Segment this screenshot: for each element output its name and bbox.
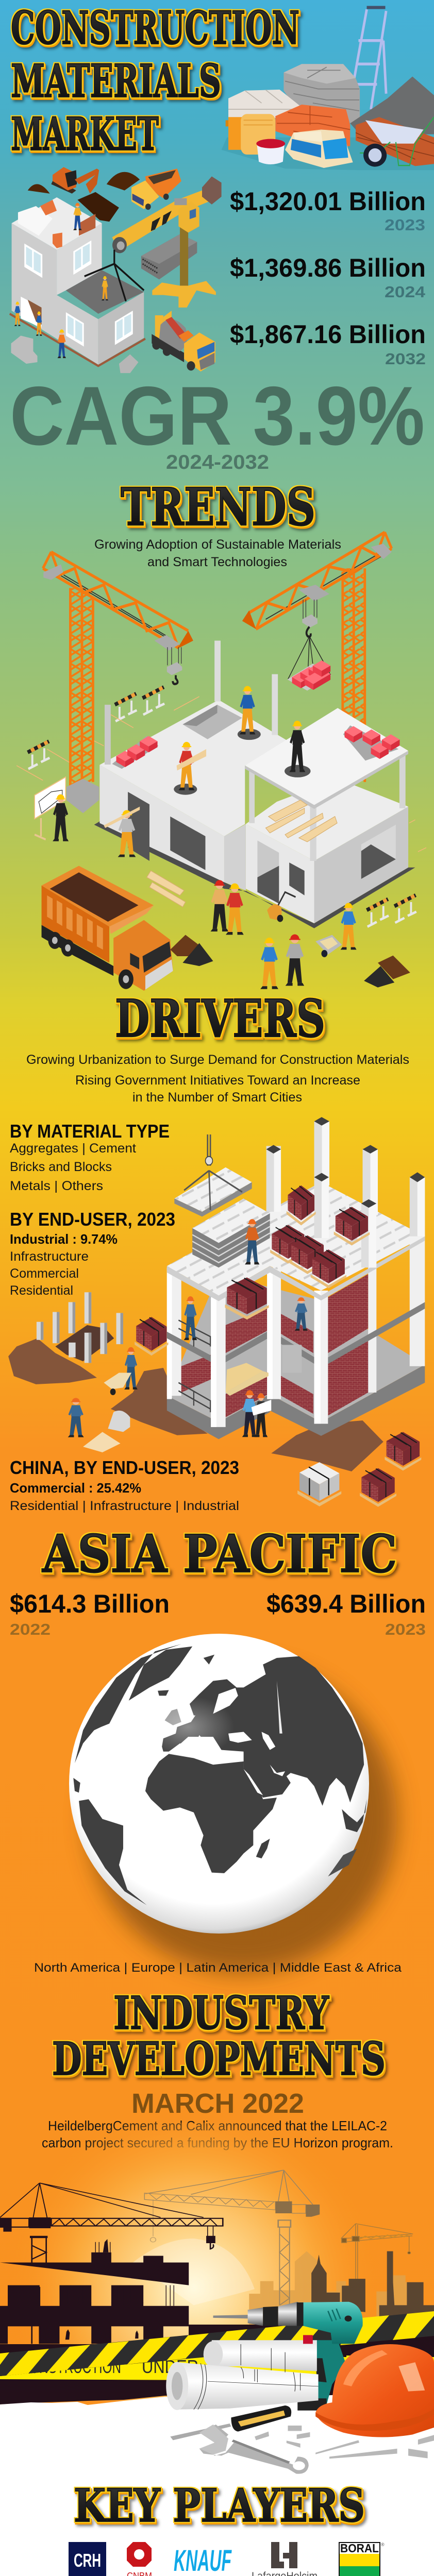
map: North America bbox=[75, 1644, 181, 1763]
logo: CRH bbox=[69, 2542, 106, 2576]
segment: by end-user: Commercial bbox=[10, 1266, 79, 1281]
icon: screwdriver bbox=[170, 2405, 291, 2440]
market value 2023: 2023 bbox=[385, 216, 425, 234]
title bbox=[11, 1, 299, 161]
icon: right tower crane bbox=[242, 532, 392, 782]
icon: left tower crane bbox=[43, 552, 193, 813]
logo: Boral bbox=[339, 2541, 385, 2576]
drivers text: Growing Urbanization to Surge Demand for Construction Materials bbox=[26, 1053, 409, 1067]
asia pacific value 2023: $639.4 Billion bbox=[266, 1589, 426, 1618]
map: Madagascar bbox=[256, 1839, 270, 1858]
segment: by material type: Bricks and Blocks bbox=[10, 1160, 112, 1174]
icon: cement bags bbox=[285, 129, 353, 168]
logos row 1 bbox=[69, 2541, 385, 2576]
caution tape: text tape: UNDER bbox=[142, 2356, 198, 2377]
segment: china by end-user: Commercial : 25.42% bbox=[10, 1480, 141, 1496]
icon: concrete panels bbox=[141, 234, 197, 279]
market value 2024 bbox=[230, 253, 426, 301]
segment: by end-user: BY END-USER, 2023 bbox=[10, 1209, 175, 1230]
map: Australia bbox=[328, 1849, 357, 1876]
icon: cement mixer truck bbox=[152, 311, 215, 371]
logo: CRH: CRH bbox=[74, 2550, 101, 2571]
icon: timber planks bbox=[356, 117, 434, 166]
icon: dump truck bbox=[131, 168, 181, 210]
icon: suspended bricks bbox=[287, 660, 331, 690]
segment: china by end-user: Residential | Infrastructure | Industrial bbox=[10, 1499, 239, 1513]
map: Scandinavia bbox=[190, 1679, 237, 1716]
segment: by end-user: Industrial : 9.74% bbox=[10, 1231, 118, 1247]
market value 2023 bbox=[230, 187, 426, 234]
icon: concrete building bbox=[94, 640, 415, 928]
workers bbox=[53, 686, 357, 989]
workers bbox=[14, 203, 108, 358]
icon: foundation pit and piles bbox=[37, 1292, 123, 1363]
asia pacific value 2023 bbox=[266, 1589, 426, 1638]
icon: dark building bbox=[0, 2252, 189, 2344]
asia pacific value 2022 bbox=[10, 1589, 170, 1638]
caution tape: text tape: CONSTRUCTION bbox=[21, 2356, 121, 2377]
market value 2032: 2032 bbox=[385, 350, 426, 368]
market value 2023: $1,320.01 Billion bbox=[230, 187, 426, 216]
icon: dark skyline bbox=[311, 2251, 434, 2317]
heading: industry developments: INDUSTRY bbox=[113, 1986, 329, 2040]
heading: asia pacific: ASIA PACIFIC bbox=[42, 1523, 397, 1584]
icon: brick pallets bbox=[135, 1185, 421, 1507]
map: Africa bbox=[145, 1754, 277, 1873]
title: CONSTRUCTION bbox=[11, 1, 299, 55]
icon: second crane bbox=[144, 2170, 313, 2305]
icon: dark tower crane bbox=[0, 2183, 223, 2344]
sky glow bbox=[0, 2123, 434, 2401]
illustration: construction site bbox=[16, 532, 426, 991]
segment: china by end-user bbox=[10, 1457, 239, 1513]
icon: red bricks on roof bbox=[112, 725, 399, 769]
icon: sun disk bbox=[133, 2239, 255, 2305]
CAGR: 2024-2032 bbox=[166, 451, 269, 473]
icon: concrete stack and slab bbox=[174, 1134, 270, 1267]
icon: barriers bbox=[16, 687, 426, 927]
illustration: tools bbox=[166, 2340, 434, 2474]
drivers text bbox=[26, 1053, 409, 1105]
logo: CNBM bbox=[127, 2542, 152, 2576]
icon: white bricks bbox=[228, 90, 301, 118]
map: Greenland and Iceland bbox=[129, 1647, 214, 1701]
icon: globe bbox=[69, 1634, 369, 1934]
map: South America bbox=[79, 1799, 147, 1905]
segment: by end-user bbox=[10, 1209, 175, 1298]
illustration: skyline with cranes bbox=[0, 2170, 434, 2344]
icon: dirt piles bbox=[170, 935, 410, 988]
map: UK bbox=[165, 1709, 181, 1725]
segment: by end-user: Infrastructure bbox=[10, 1249, 89, 1264]
logo: Boral: BORAL bbox=[340, 2541, 379, 2555]
icon: blueprint board bbox=[35, 777, 65, 839]
drivers text: Rising Government Initiatives Toward an Increase bbox=[75, 1073, 360, 1088]
logo: LafargeHolcim bbox=[252, 2542, 318, 2576]
market value 2024: $1,369.86 Billion bbox=[230, 253, 426, 282]
development text: carbon project secured a funding by the EU Horizon program. bbox=[42, 2135, 393, 2150]
icon: yellow tower crane bbox=[85, 176, 222, 308]
globe shadow bbox=[88, 1664, 397, 1973]
icon: bolts and drill bits bbox=[255, 2426, 434, 2459]
icon: wrench bbox=[199, 2425, 309, 2474]
segment: china by end-user: CHINA, BY END-USER, 2023 bbox=[10, 1457, 239, 1478]
map: seas bbox=[168, 1691, 285, 1795]
icon: dirt mounds bbox=[8, 1338, 383, 1471]
market value 2024: 2024 bbox=[385, 283, 426, 301]
icon: ladder bbox=[353, 8, 386, 109]
development text bbox=[42, 2118, 393, 2150]
other regions text: North America | Europe | Latin America | Middle East & Africa bbox=[34, 1961, 402, 1975]
heading: industry developments bbox=[52, 1986, 386, 2086]
development date: MARCH 2022 bbox=[131, 2088, 304, 2119]
segment: by material type: BY MATERIAL TYPE bbox=[10, 1121, 170, 1142]
heading: trends: TRENDS bbox=[121, 477, 315, 537]
caution tape: striped tape bbox=[0, 2311, 434, 2376]
icon: power drill bbox=[213, 2302, 363, 2344]
segment: by material type: Aggregates | Cement bbox=[10, 1141, 136, 1156]
white lower background bbox=[0, 2391, 434, 2576]
title: MARKET bbox=[11, 107, 159, 161]
market value 2032 bbox=[230, 320, 426, 368]
market value 2032: $1,867.16 Billion bbox=[230, 320, 426, 349]
illustration: building materials pile bbox=[222, 8, 434, 170]
title: MATERIALS bbox=[11, 54, 221, 108]
asia pacific value 2023: 2023 bbox=[385, 1620, 426, 1638]
drivers text: in the Number of Smart Cities bbox=[132, 1090, 302, 1105]
icon: dirt mounds and pit bbox=[28, 172, 140, 222]
icon: hard hat bbox=[315, 2344, 434, 2437]
logo: Boral: ® bbox=[381, 2542, 385, 2547]
icon: power drill handle bbox=[297, 2340, 346, 2411]
icon: orange dump truck bbox=[42, 866, 173, 991]
development text: HeildelbergCement and Calix announced that the LEILAC-2 bbox=[48, 2118, 387, 2133]
icon: insulation rolls bbox=[226, 114, 275, 155]
asia pacific value 2022: $614.3 Billion bbox=[10, 1589, 170, 1618]
icon: gravel mound bbox=[350, 76, 434, 134]
segment: by end-user: Residential bbox=[10, 1283, 73, 1298]
icon: distant crane bbox=[341, 2224, 413, 2282]
icon: faint skyline bbox=[249, 2251, 424, 2328]
icon: building bbox=[10, 197, 145, 373]
icon: excavator bbox=[51, 167, 99, 194]
illustration: brick building under construction bbox=[8, 1117, 425, 1507]
illustration: isometric building site bbox=[10, 167, 222, 373]
trends text bbox=[94, 537, 341, 569]
map: Central America bbox=[73, 1778, 80, 1793]
workers bbox=[68, 1219, 308, 1452]
segment: by material type: Metals | Others bbox=[10, 1179, 103, 1193]
icon: blueprint rolls bbox=[166, 2340, 319, 2410]
caution tape: text tape bbox=[0, 2355, 434, 2381]
trends text: Growing Adoption of Sustainable Materials bbox=[94, 537, 341, 552]
dark ground band bbox=[0, 2325, 434, 2404]
icon: orange bricks bbox=[275, 105, 350, 147]
heading: drivers: DRIVERS bbox=[115, 988, 325, 1049]
map: Eurasia bbox=[162, 1656, 364, 1806]
icon: wheelbarrow bbox=[360, 117, 434, 167]
icon: timber planks bbox=[147, 800, 337, 907]
icon: concrete blocks bbox=[283, 64, 360, 123]
drill front bbox=[213, 2302, 363, 2344]
icon: multi-storey frame bbox=[167, 1117, 425, 1439]
icon: silhouettes of workers bbox=[9, 2239, 174, 2340]
segment: by material type bbox=[10, 1121, 170, 1193]
trends text: and Smart Technologies bbox=[147, 555, 287, 569]
heading: key players: KEY PLAYERS bbox=[74, 2479, 365, 2532]
map: Southeast Asia bbox=[342, 1799, 367, 1832]
asia pacific value 2022: 2022 bbox=[10, 1620, 51, 1638]
icon: paint bucket bbox=[256, 139, 285, 164]
